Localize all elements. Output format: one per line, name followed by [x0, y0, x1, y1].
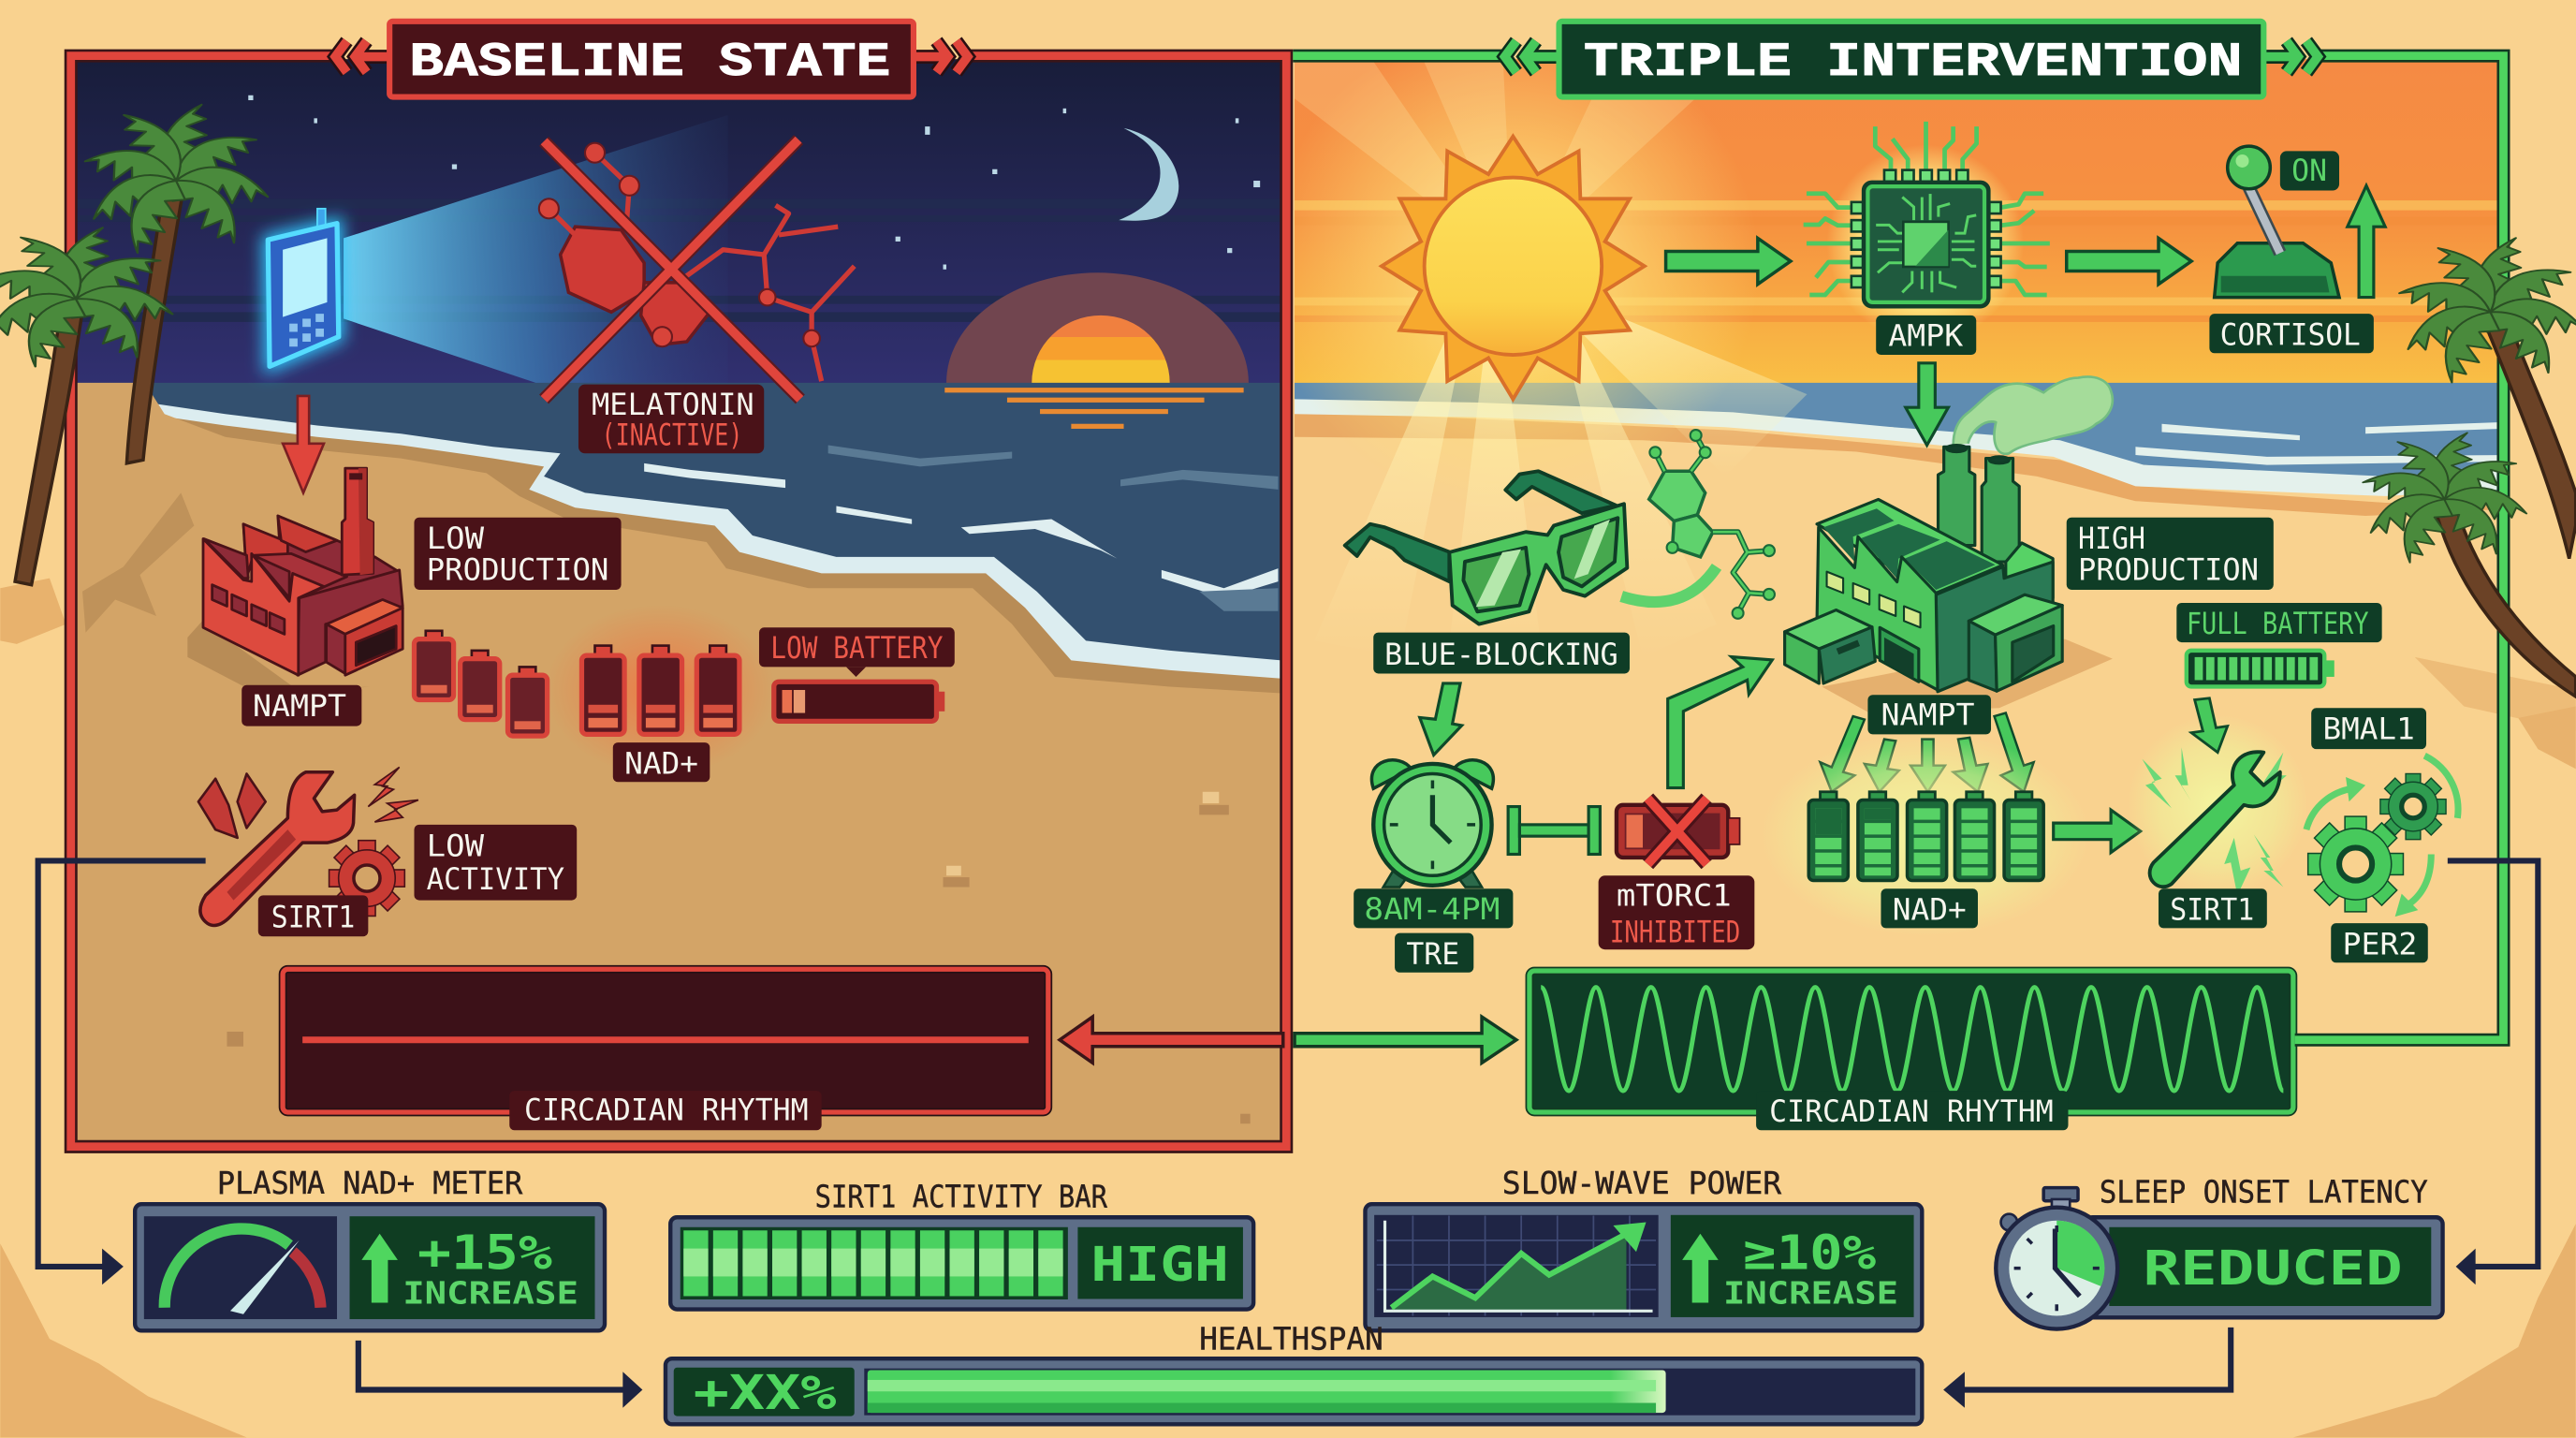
- icon: red factory: [187, 468, 402, 697]
- night sky: [73, 59, 1284, 385]
- heading: healthspan: HEALTHSPAN: [1199, 1320, 1383, 1357]
- main block right wall: [1936, 562, 2053, 692]
- label: mTORC1 inhibited: INHIBITED: [1610, 916, 1740, 949]
- label: AMPK: [1876, 315, 1976, 355]
- label: ON: [2280, 151, 2339, 191]
- label: BMAL1: [2311, 708, 2426, 749]
- metric: slow-wave power: ≥10%: [1743, 1225, 1877, 1281]
- frame: intervention border: [1293, 56, 2503, 1040]
- wet sand: [73, 414, 1281, 854]
- icon: full NAD+ batteries: [1761, 733, 2089, 936]
- label: NAD+ green: NAD+: [1893, 894, 1967, 928]
- windows: [1827, 572, 1921, 627]
- shoreline foam: [1295, 399, 2502, 496]
- chart: flat circadian rhythm: CIRCADIAN RHYTHM: [524, 1094, 809, 1128]
- icon: mTORC1 battery crossed: [1617, 799, 1740, 864]
- day sky: [1295, 59, 2502, 385]
- chart: oscillating circadian rhythm: CIRCADIAN RHYTHM: [1769, 1095, 2054, 1129]
- arrow: AMPK to cortisol: [2067, 238, 2191, 285]
- panel: baseline state: [73, 59, 1284, 1143]
- arrow: AMPK to factory: [1906, 363, 1948, 446]
- chevrons right: [2263, 41, 2318, 72]
- label: blue-blocking: BLUE-BLOCKING: [1384, 638, 1618, 672]
- shoreline foam: [73, 403, 1281, 821]
- palm: right upper: [2394, 233, 2576, 559]
- connector: sleep latency to healthspan: [1943, 1328, 2231, 1408]
- porch: [327, 599, 402, 634]
- chevrons left: [1505, 41, 1560, 72]
- dry sand: [73, 383, 1281, 1143]
- metric: SIRT1 activity bar: [670, 1217, 1253, 1310]
- frame: baseline border: [71, 56, 1286, 1147]
- chevrons left: [335, 41, 391, 72]
- icon: active wrench with sparks: [2128, 714, 2308, 895]
- sky bands: [1295, 200, 2502, 305]
- label: ON: ON: [2291, 154, 2327, 188]
- icon: low NAD+ batteries: [546, 605, 776, 775]
- wrench: [200, 772, 355, 925]
- metric: SIRT1 activity bar: HIGH: [1090, 1237, 1229, 1292]
- chimneys: [1939, 447, 1975, 546]
- icon: sun: [1382, 137, 1645, 399]
- chart: oscillating circadian rhythm: [1530, 971, 2293, 1130]
- palm: left back: [80, 100, 271, 463]
- icon: depleted small batteries: [414, 631, 548, 736]
- inhibition bar: [1508, 807, 1600, 854]
- label: full battery: FULL BATTERY: [2187, 608, 2369, 641]
- moon: [1119, 128, 1178, 221]
- metric: plasma NAD+ meter: +15%: [417, 1225, 552, 1281]
- label: BMAL1: BMAL1: [2322, 713, 2415, 747]
- label: CORTISOL: CORTISOL: [2220, 318, 2361, 352]
- label: AMPK: AMPK: [1888, 320, 1963, 354]
- label: SIRT1 red: [258, 895, 368, 936]
- connector: plasma meter to healthspan: [359, 1341, 642, 1408]
- sand specks: [227, 792, 1251, 1123]
- panel: triple intervention: [1266, 20, 2502, 1130]
- right wing: [1969, 594, 2062, 635]
- label: melatonin inactive: (INACTIVE): [602, 419, 742, 453]
- arrow: phone to factory: [283, 396, 324, 492]
- sunset reflection: [944, 388, 1244, 429]
- icon: broken wrench and gear: [198, 767, 418, 925]
- label: mTORC1 inhibited: [1599, 875, 1754, 949]
- left wall: [203, 539, 324, 675]
- wet sand band: [1295, 411, 2502, 516]
- label: low activity: LOW: [427, 830, 485, 864]
- chimney: [342, 468, 373, 575]
- label: low production: LOW: [427, 522, 485, 556]
- arrows: NAMPT to NAD+: [1821, 713, 2034, 792]
- rear deck: [2006, 543, 2053, 598]
- label: low production: [414, 518, 622, 590]
- label: NAMPT red: NAMPT: [253, 690, 346, 724]
- sparks: [368, 767, 418, 822]
- icon: alarm clock: [1371, 760, 1493, 888]
- arrow: sun to AMPK: [1666, 238, 1791, 285]
- sea: [73, 383, 1284, 686]
- sunset: [946, 272, 1249, 492]
- arrow: cross-panel green: [1295, 1017, 1516, 1063]
- label: NAMPT green: NAMPT: [1881, 699, 1974, 733]
- label: melatonin inactive: MELATONIN: [592, 389, 754, 422]
- connector: PER2 to sleep latency: [2448, 860, 2538, 1284]
- heading: sleep onset latency: SLEEP ONSET LATENCY: [2100, 1173, 2428, 1210]
- label: PER2: [2331, 923, 2428, 962]
- metric: sleep onset latency: REDUCED: [2144, 1240, 2403, 1296]
- label: mTORC1 inhibited: mTORC1: [1617, 880, 1732, 914]
- heading: SIRT1 activity bar: SIRT1 ACTIVITY BAR: [815, 1179, 1108, 1215]
- label: SIRT1 green: SIRT1: [2170, 894, 2254, 928]
- icon: stopwatch: [1996, 1188, 2117, 1329]
- arrow: cross-panel red: [1060, 1017, 1283, 1063]
- arrow: glasses to clock: [1420, 683, 1462, 755]
- icon: phone: [268, 209, 339, 366]
- palm shadow: [82, 492, 194, 633]
- connector: SIRT1 to plasma meter: [38, 860, 206, 1284]
- metric: healthspan bar: [666, 1358, 1922, 1424]
- label: high production: PRODUCTION: [2078, 553, 2259, 587]
- grid: [1377, 1215, 1656, 1316]
- heading: plasma NAD+ meter: PLASMA NAD+ METER: [217, 1165, 523, 1201]
- icon: blue-blocking glasses: [1345, 471, 1627, 624]
- label: melatonin inactive: [578, 385, 764, 453]
- gear: [329, 841, 404, 916]
- left wing: [1785, 610, 1872, 649]
- label: TRE: TRE: [1406, 938, 1459, 972]
- arrow: mTORC1 to factory: [1668, 657, 1772, 788]
- palm: left front: [0, 223, 177, 585]
- metric: plasma NAD+ meter: INCREASE: [402, 1274, 578, 1311]
- label: 8AM-4PM: 8AM-4PM: [1364, 893, 1500, 927]
- chevrons right: [914, 41, 968, 72]
- label: PER2: PER2: [2343, 928, 2417, 961]
- label: NAD+ green: [1881, 888, 1978, 928]
- stars: [248, 95, 1260, 270]
- icon: BMAL1 and PER2 gears: [2306, 756, 2458, 917]
- arrow: battery to SIRT1: [2191, 698, 2228, 753]
- label: NAD+ red: [613, 742, 710, 782]
- icon: low battery bar: [774, 682, 944, 721]
- icon: AMPK chip: [1804, 122, 2050, 342]
- title: triple intervention: TRIPLE INTERVENTION: [1584, 37, 2242, 90]
- sea foam streaks: [2135, 422, 2502, 465]
- label: NAMPT green: [1867, 695, 1991, 734]
- label: NAMPT red: [242, 685, 361, 726]
- sun glow and rays: [1295, 59, 1807, 552]
- metric: sleep onset latency: [1996, 1188, 2443, 1329]
- gauge: [165, 1228, 320, 1308]
- door: [1880, 627, 1919, 682]
- label: 8AM-4PM: [1354, 888, 1513, 928]
- title: triple intervention: [1505, 22, 2318, 97]
- title: baseline state: BASELINE STATE: [409, 37, 890, 90]
- sky bands: [73, 198, 1284, 322]
- palm: right lower: [2359, 429, 2576, 697]
- main block left wall: [1817, 527, 1938, 690]
- icon: cortisol lever: [2215, 146, 2339, 298]
- label: low production: PRODUCTION: [427, 553, 608, 587]
- smoke: [1954, 377, 2113, 454]
- icon: green factory: [1785, 377, 2113, 713]
- sea: [1295, 383, 2502, 492]
- label: TRE: [1395, 933, 1473, 973]
- debris: [198, 773, 266, 838]
- segments: [683, 1230, 1063, 1296]
- title: baseline state: [335, 22, 968, 97]
- label: high production: HIGH: [2078, 522, 2145, 556]
- metric: slow-wave power: [1365, 1204, 1922, 1330]
- metric: healthspan bar: +XX%: [694, 1365, 837, 1420]
- label: low activity: ACTIVITY: [427, 863, 564, 897]
- callout: low battery: [759, 627, 955, 677]
- icon: full battery: [2187, 651, 2334, 686]
- callout: low battery: LOW BATTERY: [770, 632, 944, 666]
- roof: [1817, 499, 2003, 593]
- icon: melatonin molecule crossed out: [539, 139, 855, 399]
- windows: [212, 585, 285, 634]
- heading: slow-wave power: SLOW-WAVE POWER: [1502, 1165, 1782, 1201]
- arrow: cortisol up: [2348, 185, 2385, 298]
- label: high production: [2067, 518, 2274, 590]
- foam streaks: [644, 463, 1278, 598]
- icon: green molecule: [1621, 430, 1775, 619]
- chart: flat circadian rhythm: [283, 969, 1048, 1130]
- metric: slow-wave power: INCREASE: [1723, 1274, 1898, 1311]
- label: NAD+ red: NAD+: [624, 747, 698, 781]
- blue light beam: [344, 115, 728, 383]
- arrow: NAD+ to SIRT1: [2054, 810, 2141, 853]
- metric: plasma NAD+ meter: [135, 1204, 605, 1330]
- label: low activity: [414, 825, 577, 901]
- label: SIRT1 red: SIRT1: [271, 902, 355, 935]
